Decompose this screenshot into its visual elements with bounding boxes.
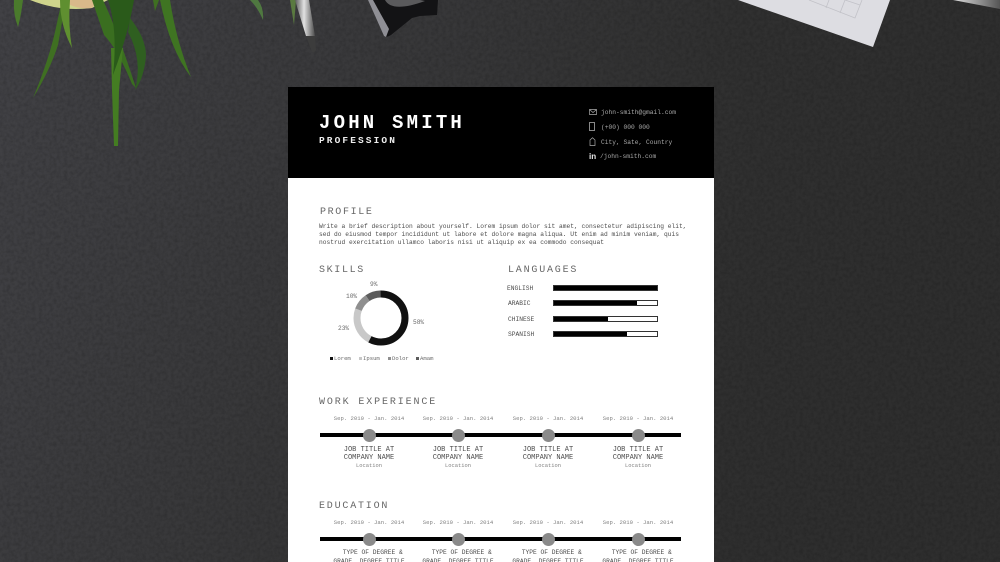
binder clip xyxy=(368,0,438,37)
plant leaves xyxy=(14,0,296,146)
work timeline: Sep. 2010 - Jan. 2014 xyxy=(603,415,673,422)
work timeline: Sep. 2010 - Jan. 2014 xyxy=(513,415,583,422)
icon: phone xyxy=(589,122,595,131)
job 2: JOB TITLE AT xyxy=(433,446,483,454)
job 2: COMPANY NAME xyxy=(433,454,483,462)
phone: (+00) 000 000 xyxy=(601,124,650,131)
email: john-smith@gmail.com xyxy=(601,109,676,116)
profile text: sed do eiusmod tempor incididunt ut labore et dolore magna aliqua. Ut enim ad minim veniam, quis xyxy=(319,231,679,238)
name: JOHN SMITH xyxy=(319,112,465,134)
donut chart xyxy=(354,290,408,346)
corner object xyxy=(953,0,1000,9)
degree 4: TYPE OF DEGREE & xyxy=(612,549,672,556)
job 2 xyxy=(433,446,483,462)
education dates: Sep. 2010 - Jan. 2014 xyxy=(334,519,404,526)
degree 2: TYPE OF DEGREE & xyxy=(432,549,492,556)
work timeline: Location xyxy=(625,463,651,469)
pen xyxy=(295,0,315,36)
education timeline: Sep. 2010 - Jan. 2014 xyxy=(603,519,673,526)
language label: Chinese: CHINESE xyxy=(508,316,534,323)
work timeline: Location xyxy=(535,463,561,469)
degree 2 xyxy=(422,549,494,562)
degree 3 xyxy=(512,549,584,562)
profile heading: PROFILE xyxy=(320,207,374,218)
language bar: Spanish xyxy=(553,331,658,337)
education timeline: Sep. 2010 - Jan. 2014 xyxy=(423,519,493,526)
profile text: Write a brief description about yourself. Lorem ipsum dolor sit amet, consectetur adipiscing elit, xyxy=(319,223,687,230)
work timeline: Sep. 2010 - Jan. 2014 xyxy=(423,415,493,422)
language label: Arabic: ARABIC xyxy=(508,300,531,307)
job 3 xyxy=(523,446,573,462)
degree 4 xyxy=(602,549,674,562)
education line xyxy=(320,537,681,541)
work line xyxy=(320,433,681,437)
pot rim xyxy=(30,0,108,9)
donut label 10%: 10% xyxy=(346,293,357,300)
job 1 xyxy=(344,446,394,462)
header band xyxy=(288,87,714,178)
donut legend: Amam xyxy=(420,355,433,362)
profile text xyxy=(319,223,687,246)
donut label 9%: 9% xyxy=(370,281,377,288)
profession: PROFESSION xyxy=(319,135,397,146)
languages heading: LANGUAGES xyxy=(508,265,578,276)
education timeline: Sep. 2010 - Jan. 2014 xyxy=(513,519,583,526)
language bar: Chinese xyxy=(553,316,658,322)
icon: linkedin: in xyxy=(589,152,596,161)
work markers xyxy=(362,428,376,442)
job 1: JOB TITLE AT xyxy=(344,446,394,454)
job 4: JOB TITLE AT xyxy=(613,446,663,454)
degree 1 xyxy=(333,549,405,562)
job 4: COMPANY NAME xyxy=(613,454,663,462)
education timeline xyxy=(320,519,681,562)
degree 3: TYPE OF DEGREE & xyxy=(522,549,582,556)
degree 1: TYPE OF DEGREE & xyxy=(343,549,403,556)
work timeline xyxy=(320,415,681,469)
work timeline: Location xyxy=(445,463,471,469)
skills heading: SKILLS xyxy=(319,265,365,276)
donut legend: Lorem xyxy=(334,355,351,362)
job 3: COMPANY NAME xyxy=(523,454,573,462)
resume page xyxy=(288,87,714,562)
linkedin url: /john-smith.com xyxy=(600,153,656,160)
icon: home xyxy=(590,137,596,146)
donut label 23%: 23% xyxy=(338,325,349,332)
work experience heading: WORK EXPERIENCE xyxy=(319,397,437,408)
work dates: Sep. 2010 - Jan. 2014 xyxy=(334,415,404,422)
education markers xyxy=(362,532,376,546)
language label: Spanish: SPANISH xyxy=(508,331,534,338)
job 4 xyxy=(613,446,663,462)
donut legend: Ipsum xyxy=(363,355,380,362)
notebook grid xyxy=(809,0,862,18)
language bar: Arabic xyxy=(553,300,658,306)
language bar: English xyxy=(553,285,658,291)
education heading: EDUCATION xyxy=(319,501,389,512)
notebook page xyxy=(738,0,890,47)
donut legend xyxy=(330,355,434,362)
job 3: JOB TITLE AT xyxy=(523,446,573,454)
profile text: nostrud exercitation ullamco laboris nisi ut aliquip ex ea commodo consequat xyxy=(319,239,604,246)
donut label 58%: 58% xyxy=(413,319,424,326)
address: City, Sate, Country xyxy=(601,139,672,146)
job 1: COMPANY NAME xyxy=(344,454,394,462)
donut legend: Dolor xyxy=(392,355,409,362)
icon: mail xyxy=(589,109,597,115)
work timeline: Location xyxy=(356,463,382,469)
language label: English: ENGLISH xyxy=(507,285,533,292)
